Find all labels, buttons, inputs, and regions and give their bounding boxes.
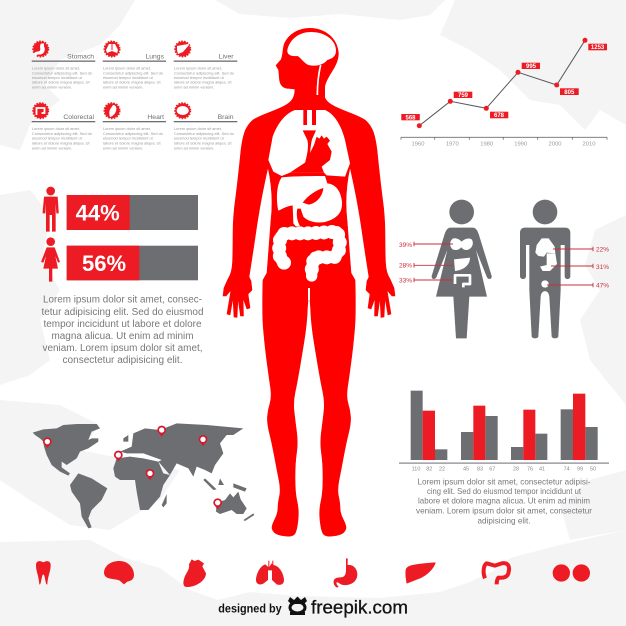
- text block: gender description: tetur adipisicing elit. Sed do eiusmod: [42, 307, 204, 318]
- value labels: [401, 44, 607, 121]
- text block: organ descriptions: [32, 65, 234, 150]
- woman organs: [450, 238, 473, 287]
- text block: organ descriptions: labore et dolore magna aliqua. Ut: [174, 140, 232, 146]
- icon: heart: [183, 559, 206, 587]
- icon: liver: [405, 562, 436, 584]
- lungs: [268, 110, 350, 177]
- text block: organ descriptions: Lorem ipsum dolor sit amet,: [103, 126, 151, 131]
- bar values: 82: [426, 467, 432, 473]
- axis: 2000: [549, 142, 561, 148]
- world map: [33, 423, 254, 528]
- bar: male 44%: 44%: [76, 200, 120, 226]
- text block: organ descriptions: enim ad minim veniam.: [174, 145, 214, 150]
- icon: brain: [104, 561, 134, 584]
- text block: organ descriptions: Lorem ipsum dolor sit amet,: [103, 65, 151, 70]
- bar values: 45: [463, 467, 469, 473]
- heading: organ names: Colorectal: [63, 114, 94, 121]
- freepik wordmark: freepik.com: [311, 598, 408, 618]
- text block: gender description: veniam. Lorem ipsum dolor sit amet,: [42, 343, 202, 354]
- text block: organ descriptions: enim ad minim veniam.: [103, 145, 143, 150]
- callout percentages: 33%: [399, 278, 412, 285]
- bar values: 50: [590, 467, 596, 473]
- trend line: [419, 40, 585, 126]
- text block: organ descriptions: Consectetur adipiscing elit. Sed do: [32, 70, 92, 75]
- grouped bar chart: [399, 391, 609, 526]
- icon: man figure: [520, 200, 570, 338]
- head: [276, 28, 339, 100]
- text block: organ descriptions: labore et dolore magna aliqua. Ut: [103, 140, 161, 146]
- axis: [401, 137, 607, 148]
- text block: gender description: Lorem ipsum dolor sit amet, consec-: [43, 294, 202, 306]
- bar: female 56%: 56%: [82, 251, 126, 276]
- text block: organ descriptions: enim ad minim veniam.: [103, 85, 143, 90]
- text block: gender description: tempor incicidunt ut labore et dolore: [44, 319, 202, 330]
- gender organ comparison: [399, 200, 609, 338]
- text block: organ descriptions: Lorem ipsum dolor sit amet,: [174, 126, 222, 131]
- bar values: [412, 467, 596, 473]
- bar values: 67: [489, 467, 495, 473]
- text block: gender description: consectetur adipisicing elit.: [62, 355, 182, 366]
- text block: gender description: magna alicua. Ut enim ad minim: [52, 331, 194, 342]
- axis: 1980: [480, 142, 493, 148]
- icon: freepik crown: [288, 596, 307, 615]
- icon: two circles: [553, 564, 590, 582]
- bar values: 83: [477, 467, 483, 473]
- line chart: [401, 38, 607, 147]
- colon: [279, 232, 340, 276]
- icon: woman figure: [432, 200, 492, 338]
- text block: organ descriptions: labore et dolore magna aliqua. Ut: [32, 80, 90, 85]
- esophagus: [303, 130, 316, 162]
- text block: bar chart description: adipisicing elit.: [478, 516, 530, 526]
- text block: bar chart description: veniam. Lorem ipsum dolor sit amet, consectetur: [416, 506, 592, 516]
- bar values: 22: [439, 467, 445, 473]
- text block: gender description: [42, 294, 204, 366]
- rules under organ names: [32, 60, 237, 122]
- value labels: 759: [458, 93, 469, 99]
- map pins: [43, 426, 222, 509]
- heading: organ names: Heart: [147, 114, 164, 121]
- heading: organ names: Stomach: [67, 54, 94, 60]
- liver and stomach: [277, 176, 342, 227]
- icon: colorectal badge: [33, 103, 48, 118]
- value labels: 678: [494, 113, 505, 119]
- heading: organ names: Brain: [218, 114, 234, 121]
- text block: organ descriptions: Consectetur adipiscing elit. Sed do: [32, 131, 92, 136]
- axis: 2010: [583, 142, 595, 148]
- heading: organ names: [63, 54, 234, 121]
- callout percentages: 22%: [596, 246, 609, 254]
- heading: organ names: Lungs: [145, 54, 165, 60]
- spinal cord: [317, 65, 321, 95]
- value labels: 1253: [591, 45, 605, 51]
- bar values: 74: [564, 467, 570, 473]
- spleen slit: [303, 188, 323, 205]
- body right half: [308, 88, 395, 536]
- footer: freepik credit: [218, 596, 408, 618]
- axis: 1970: [446, 142, 459, 148]
- text block: organ descriptions: eiusmod tempor incididunt ut: [174, 75, 225, 80]
- text block: organ descriptions: enim ad minim veniam.: [32, 145, 72, 150]
- body left half: [223, 88, 310, 536]
- icon: heart badge: [104, 103, 120, 118]
- designed by label: designed by: [218, 604, 282, 616]
- callout percentages: [399, 242, 609, 290]
- text block: organ descriptions: Consectetur adipiscing elit. Sed do: [174, 70, 234, 75]
- callout percentages: 39%: [399, 242, 412, 249]
- text block: bar chart description: [416, 476, 592, 526]
- continents: [33, 423, 254, 528]
- icon: liver badge: [175, 42, 190, 56]
- heart: [290, 135, 332, 173]
- text block: organ descriptions: eiusmod tempor incididunt ut: [32, 136, 83, 141]
- bar: male 44%: [67, 195, 198, 230]
- bar values: 28: [513, 467, 519, 473]
- text block: organ descriptions: enim ad minim veniam.: [32, 85, 72, 90]
- icon: woman: [41, 237, 60, 282]
- text block: bar chart description: Lorem ipsum dolor sit amet, consectetur adipisi-: [418, 476, 591, 486]
- bar values: 76: [527, 467, 533, 473]
- baseline: [399, 463, 609, 464]
- icon: stomach: [334, 558, 357, 588]
- human body figure: [223, 28, 395, 536]
- trachea: [303, 109, 316, 125]
- value labels: 805: [564, 90, 575, 96]
- icon: stomach badge: [33, 42, 48, 56]
- bar values: 99: [577, 467, 583, 473]
- text block: organ descriptions: Lorem ipsum dolor sit amet,: [32, 126, 80, 131]
- bars: [411, 391, 598, 460]
- text block: bar chart description: labore et dolore magna alicua. Ut enim ad minim: [418, 496, 590, 506]
- text block: organ descriptions: Consectetur adipiscing elit. Sed do: [103, 70, 163, 75]
- bar values: 41: [539, 467, 545, 473]
- icon: lungs: [256, 561, 284, 585]
- bottom organ icon row: [36, 558, 590, 588]
- text block: organ descriptions: eiusmod tempor incididunt ut: [103, 75, 154, 80]
- man organs: [535, 238, 557, 288]
- head and organs: [268, 28, 350, 276]
- icon: colon: [484, 563, 509, 584]
- text block: organ descriptions: eiusmod tempor incididunt ut: [32, 75, 83, 80]
- icon: brain badge: [175, 103, 190, 118]
- text block: organ descriptions: eiusmod tempor incididunt ut: [174, 136, 225, 141]
- brain: [287, 32, 336, 66]
- heading: organ names: Liver: [219, 54, 234, 60]
- callout percentages: 28%: [399, 263, 412, 270]
- panel: gender percentage bars: [41, 187, 203, 366]
- bar values: 110: [412, 467, 420, 473]
- icon: lungs badge: [104, 42, 120, 56]
- text block: bar chart description: cing elit. Sed do eiusmod tempor incididunt ut: [427, 486, 582, 496]
- text block: organ descriptions: Consectetur adipiscing elit. Sed do: [174, 131, 234, 136]
- icon: tooth: [36, 561, 51, 584]
- text block: organ descriptions: Lorem ipsum dolor sit amet,: [32, 65, 80, 70]
- icon: man: [43, 187, 59, 232]
- panel: organ info grid: [32, 42, 237, 150]
- text block: organ descriptions: labore et dolore magna aliqua. Ut: [103, 80, 161, 85]
- callout percentages: 47%: [596, 283, 609, 290]
- text block: organ descriptions: eiusmod tempor incididunt ut: [103, 136, 154, 141]
- text block: organ descriptions: labore et dolore magna aliqua. Ut: [32, 140, 90, 146]
- data points: [417, 38, 588, 128]
- text block: organ descriptions: labore et dolore magna aliqua. Ut: [174, 80, 232, 85]
- callout percentages: 31%: [596, 264, 609, 271]
- text block: organ descriptions: Consectetur adipiscing elit. Sed do: [103, 131, 163, 136]
- axis: 1990: [514, 142, 527, 148]
- bar: female 56%: [67, 246, 198, 280]
- callout lines: [414, 242, 593, 287]
- value labels: 995: [526, 64, 537, 70]
- text block: organ descriptions: enim ad minim veniam.: [174, 85, 214, 90]
- axis: 1960: [412, 142, 424, 148]
- text block: organ descriptions: Lorem ipsum dolor sit amet,: [174, 65, 222, 70]
- leg gap: [308, 288, 310, 300]
- value labels: 568: [405, 115, 416, 121]
